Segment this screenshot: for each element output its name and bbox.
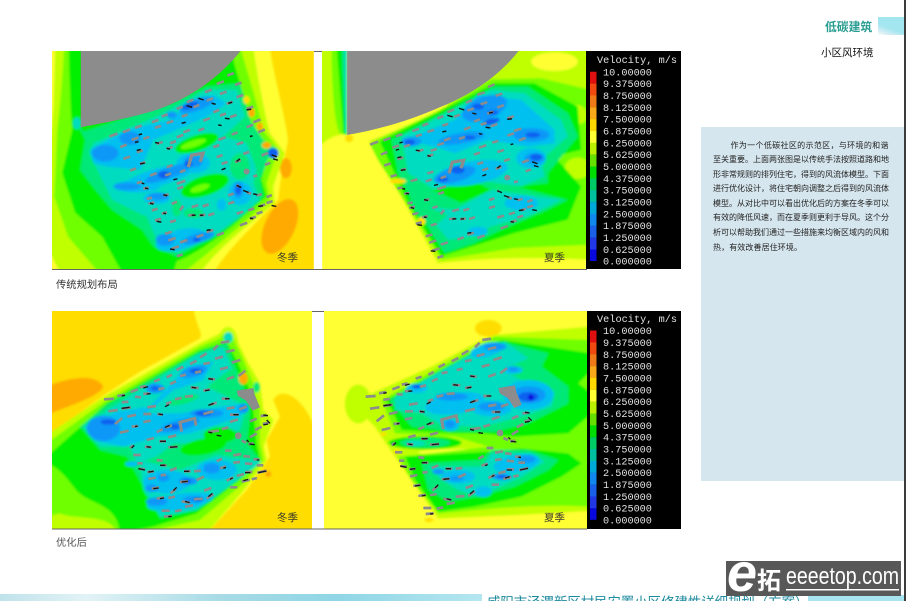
legend: velocity scale bottom: 8.750000 xyxy=(603,351,652,362)
heading: low carbon building: 低碳建筑 xyxy=(825,20,872,34)
grey masked area xyxy=(347,51,519,135)
season label: winter top: 冬季 xyxy=(277,252,298,264)
heading tab xyxy=(878,17,904,35)
legend: velocity scale bottom: 3.125000 xyxy=(603,457,652,468)
legend: velocity scale bottom xyxy=(587,311,681,529)
legend: velocity scale bottom: 7.500000 xyxy=(603,374,652,386)
panel: traditional layout summer wind field xyxy=(322,51,586,269)
panel: description text: 至关重要。上面两张图是以传统手法按照道路和地 xyxy=(713,155,889,164)
legend: velocity scale bottom: 10.00000 xyxy=(603,327,652,338)
footer bar left xyxy=(0,594,482,601)
building footprints xyxy=(104,341,270,517)
legend: velocity scale top: 1.250000 xyxy=(603,234,652,245)
panel: description text: 热，有效改善居住环境。 xyxy=(713,243,802,252)
season label: winter bottom: 冬季 xyxy=(277,512,298,524)
building footprints xyxy=(370,84,539,258)
logo: eeeetop watermark: 拓 xyxy=(757,568,781,595)
panel: description text xyxy=(701,127,905,481)
panel: traditional layout winter wind field xyxy=(52,51,314,269)
legend: velocity scale top: 3.125000 xyxy=(603,198,652,210)
grey masked area xyxy=(81,51,241,127)
legend: velocity scale top: 8.125000 xyxy=(603,104,652,115)
legend: velocity scale top: 4.375000 xyxy=(603,175,652,186)
legend: velocity scale bottom: 3.750000 xyxy=(603,446,652,456)
season label: summer top: 夏季 xyxy=(544,252,565,264)
legend: velocity scale top xyxy=(586,51,681,269)
subheading: community wind environment: 小区风环境 xyxy=(821,47,874,59)
panel: description text: 形非常规则的排列住宅，得到的风流体模型。下面 xyxy=(713,170,889,178)
legend: velocity scale top: 9.375000 xyxy=(603,80,652,91)
panel: description text: 有效的降低风速，而在夏季则更利于导风。这个分 xyxy=(713,213,889,222)
legend: velocity scale bottom: 9.375000 xyxy=(603,339,652,350)
panel: optimised layout winter wind field xyxy=(52,311,312,528)
legend: velocity scale top: 5.625000 xyxy=(603,151,652,162)
legend: velocity scale top: Velocity, m/s xyxy=(597,55,677,67)
legend: velocity scale bottom: 5.625000 xyxy=(603,410,652,421)
legend: velocity scale bottom: 0.000000 xyxy=(603,516,652,528)
panel: description text: 析可以帮助我们通过一些措施来均衡区域内的风和 xyxy=(713,228,889,237)
caption: traditional layout: 传统规划布局 xyxy=(56,280,118,291)
legend: velocity scale bottom: 1.875000 xyxy=(603,481,652,492)
season label: summer bottom: 夏季 xyxy=(544,512,565,524)
panel: description text: 进行优化设计，将住宅朝向调整之后得到的风流体 xyxy=(713,184,889,193)
footer bar right xyxy=(808,595,904,601)
panel: optimised layout summer wind field xyxy=(324,311,587,528)
building footprints xyxy=(109,73,278,256)
caption: after optimisation: 优化后 xyxy=(56,538,87,549)
legend: velocity scale top: 3.750000 xyxy=(603,187,652,198)
legend: velocity scale top: 6.875000 xyxy=(603,128,652,138)
legend: velocity scale top: 0.625000 xyxy=(603,246,652,257)
legend: velocity scale bottom: 6.250000 xyxy=(603,398,652,409)
legend: velocity scale top: 0.000000 xyxy=(603,258,652,269)
legend: velocity scale top: 2.500000 xyxy=(603,210,652,221)
legend: velocity scale top: 6.250000 xyxy=(603,139,652,150)
legend: velocity scale bottom: 2.500000 xyxy=(603,469,652,480)
legend: velocity scale bottom: Velocity, m/s xyxy=(597,314,677,326)
legend: velocity scale bottom: 1.250000 xyxy=(603,493,652,504)
legend: velocity scale bottom: 4.375000 xyxy=(603,434,652,445)
legend: velocity scale top: 10.00000 xyxy=(603,68,652,79)
panel: description text: 作为一个低碳社区的示范区，与环境的和谐 xyxy=(730,140,888,150)
legend: velocity scale top: 8.750000 xyxy=(603,92,652,103)
legend: velocity scale bottom: 6.875000 xyxy=(603,386,652,397)
legend: velocity scale bottom: 0.625000 xyxy=(603,505,652,516)
legend: velocity scale top: 1.875000 xyxy=(603,222,652,233)
legend: velocity scale top: 5.000000 xyxy=(603,163,652,174)
logo: eeeetop watermark xyxy=(726,561,901,596)
right edge line xyxy=(904,0,906,601)
building footprints xyxy=(366,339,532,514)
legend: velocity scale top: 7.500000 xyxy=(603,116,652,127)
panel: description text: 模型。从对比中可以看出优化后的方案在冬季可以 xyxy=(713,198,889,208)
divider lines between maps xyxy=(52,51,587,530)
legend: velocity scale bottom: 8.125000 xyxy=(603,363,652,374)
legend: velocity scale bottom: 5.000000 xyxy=(603,422,652,433)
